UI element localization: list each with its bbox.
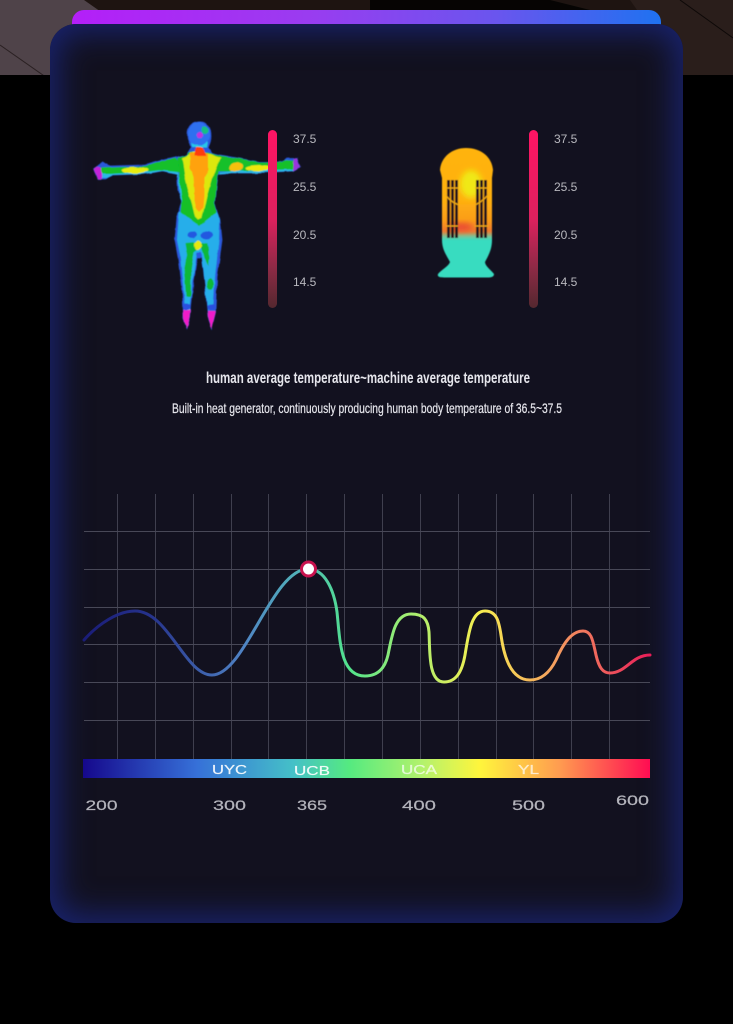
yellow heat patch	[460, 170, 482, 198]
scale labels: 14.5	[554, 275, 578, 289]
torso green zone	[178, 152, 222, 226]
right arm green zone	[215, 155, 296, 171]
wavelength axis labels: 400	[402, 797, 436, 813]
body silhouette	[94, 122, 300, 329]
arm warm patches	[122, 167, 148, 173]
card contents	[82, 120, 652, 810]
scale labels: 25.5	[293, 180, 317, 194]
band labels	[212, 762, 539, 778]
band labels: UCB	[294, 763, 330, 778]
peak marker	[300, 560, 317, 578]
left arm green zone	[100, 158, 182, 174]
leg green zones	[184, 242, 198, 298]
left grille	[447, 180, 458, 238]
head thermal zones	[188, 122, 210, 147]
thermal image: machine	[438, 148, 494, 278]
scale labels: 20.5	[554, 228, 578, 242]
torso orange zone	[190, 153, 208, 212]
background wood photo strip	[0, 0, 733, 75]
thermal image: human body	[93, 122, 301, 331]
hand tips	[93, 164, 102, 180]
spectrum bar	[83, 759, 650, 778]
scale labels	[554, 132, 578, 289]
right grille	[476, 180, 487, 238]
band labels: UYC	[212, 762, 247, 777]
wavelength axis labels: 300	[213, 797, 246, 813]
scale bar	[268, 130, 277, 308]
red heat patch	[449, 223, 473, 231]
lower body cyan zone	[177, 212, 220, 310]
grille cross bars	[444, 188, 490, 226]
machine body	[438, 148, 494, 278]
temperature scale: human	[268, 130, 317, 308]
main dark card	[50, 24, 683, 923]
neck hot spot	[195, 143, 206, 156]
gradient top bar	[72, 10, 661, 34]
hip blue patches	[188, 232, 196, 238]
scale bar	[529, 130, 538, 308]
subheading: Built-in heat generator, continuously producing human body temperature of 36.5~37.5	[172, 400, 562, 416]
scale labels: 37.5	[554, 132, 578, 146]
spectrum line chart	[84, 494, 650, 759]
wavelength axis labels	[86, 792, 649, 813]
temperature scale: machine	[529, 130, 578, 308]
feet	[182, 308, 192, 329]
scale labels: 14.5	[293, 275, 317, 289]
band labels: UCA	[401, 762, 437, 777]
spectrum curve	[84, 569, 650, 682]
heading: human average temperature~machine average temperature	[206, 370, 530, 387]
wavelength axis labels: 365	[297, 797, 327, 813]
wavelength axis labels: 200	[86, 797, 118, 813]
scale labels: 20.5	[293, 228, 317, 242]
scale labels	[293, 132, 317, 289]
torso yellow zone	[182, 152, 221, 220]
body coloured zones	[93, 122, 301, 331]
wavelength axis labels: 500	[512, 797, 545, 813]
upper body cyan rim	[100, 168, 296, 205]
band labels: YL	[518, 762, 539, 777]
wavelength axis labels: 600	[616, 792, 649, 808]
scale labels: 25.5	[554, 180, 578, 194]
scale labels: 37.5	[293, 132, 317, 146]
